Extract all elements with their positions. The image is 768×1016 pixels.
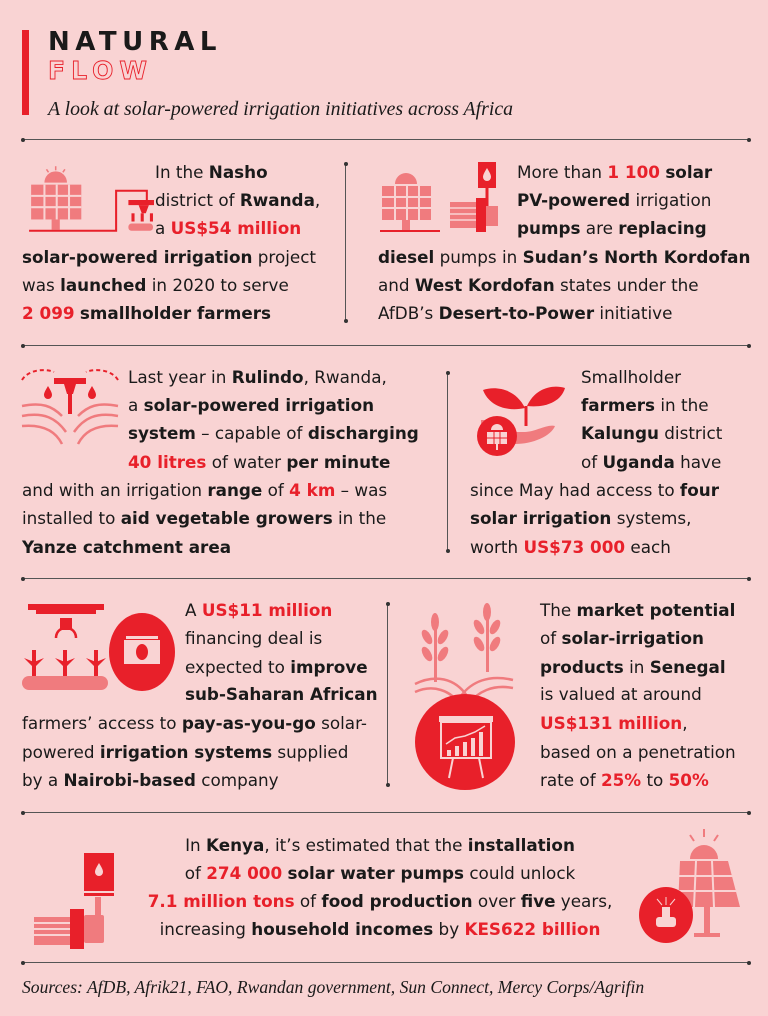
panel: Senegal market: based on a penetration	[540, 742, 736, 762]
panel: Nasho Rwanda: solar-powered irrigation project	[22, 247, 316, 267]
text: 7.1 million tons of food production over five years,	[148, 891, 612, 911]
text	[148, 835, 612, 939]
panel: Kalungu Uganda: Kalungu district	[581, 423, 722, 443]
panel: Sudan Kordofan: and West Kordofan states under the	[378, 275, 699, 295]
panel: Rulindo: and with an irrigation range of 4 km – was	[22, 480, 387, 500]
panel: Sudan Kordofan	[378, 162, 750, 323]
header	[22, 27, 513, 120]
panel: Senegal market: US$131 million,	[540, 713, 688, 733]
text: In Kenya, it’s estimated that the installation	[185, 835, 575, 855]
panel: Senegal market: products in Senegal	[540, 657, 726, 677]
icon: sprinkler crops and money badge	[22, 604, 175, 691]
panel: Senegal market	[414, 600, 736, 790]
text	[540, 600, 736, 790]
panel: Kalungu Uganda: solar irrigation systems,	[470, 508, 691, 528]
icon: hand with plant and solar badge	[477, 386, 565, 456]
icon: solar panel and sprinkler	[29, 166, 154, 232]
panel: Nasho Rwanda	[22, 162, 320, 323]
panel: Rulindo: system – capable of discharging	[128, 423, 419, 443]
panel: Senegal market: is valued at around	[540, 684, 702, 704]
panel: Rulindo: Yanze catchment area	[22, 537, 231, 557]
icon: solar panel and pump	[380, 162, 498, 232]
panel: Nasho Rwanda: a US$54 million	[155, 218, 301, 238]
text	[22, 367, 419, 557]
panel: Sudan Kordofan: PV-powered irrigation	[517, 190, 711, 210]
sources: Sources: AfDB, Afrik21, FAO, Rwandan government, Sun Connect, Mercy Corps/Agrifin	[22, 977, 644, 997]
panel: Kalungu Uganda: Smallholder	[581, 367, 681, 387]
panel: US$11 million financing: financing deal is	[185, 628, 322, 648]
panel: Kalungu Uganda	[470, 367, 722, 557]
panel: Kalungu Uganda: worth US$73 000 each	[470, 537, 671, 557]
text	[378, 162, 750, 323]
panel: Kenya	[34, 829, 740, 949]
icon: sprinkler over field	[21, 369, 119, 444]
panel: Nasho Rwanda: district of Rwanda,	[155, 190, 320, 210]
panel: US$11 million financing: farmers’ access to pay-as-you-go solar-	[22, 713, 367, 733]
panel: US$11 million financing: sub-Saharan African	[185, 684, 378, 704]
panel: Sudan Kordofan: diesel pumps in Sudan’s North Kordofan	[378, 247, 750, 267]
panel: Nasho Rwanda: In the Nasho	[155, 162, 268, 182]
title: NATURAL: NATURAL	[48, 27, 222, 57]
text	[470, 367, 722, 557]
panel: US$11 million financing: expected to improve	[185, 657, 368, 677]
panel: US$11 million financing: A US$11 million	[185, 600, 332, 620]
panel: Sudan Kordofan: pumps are replacing	[517, 218, 707, 238]
subtitle: A look at solar-powered irrigation initiatives across Africa	[48, 98, 513, 120]
panel: Nasho Rwanda: 2 099 smallholder farmers	[22, 303, 271, 323]
icon: wheat field and chart badge	[414, 603, 515, 790]
text: of 274 000 solar water pumps could unlock	[185, 863, 575, 883]
panel: Senegal market: rate of 25% to 50%	[540, 770, 709, 790]
panel: Sudan Kordofan: AfDB’s Desert-to-Power initiative	[378, 303, 672, 323]
panel: Kalungu Uganda: of Uganda have	[581, 452, 721, 472]
text	[22, 162, 320, 323]
panel: Nasho Rwanda: was launched in 2020 to serve	[22, 275, 289, 295]
panel: Kalungu Uganda: farmers in the	[581, 395, 709, 415]
icon: solar panel with sprinkler badge	[639, 829, 740, 943]
panel: Senegal market: The market potential	[540, 600, 735, 620]
panel: US$11 million financing	[22, 600, 378, 790]
panel: Senegal market: of solar-irrigation	[540, 628, 704, 648]
text	[22, 600, 378, 790]
panel: Rulindo: Last year in Rulindo, Rwanda,	[128, 367, 387, 387]
panel: Rulindo: installed to aid vegetable growers in the	[22, 508, 386, 528]
panel: Kalungu Uganda: since May had access to four	[470, 480, 719, 500]
panel: Rulindo: a solar-powered irrigation	[128, 395, 374, 415]
panel: Sudan Kordofan: More than 1 100 solar	[517, 162, 712, 182]
panel: Rulindo	[21, 367, 419, 557]
panel: Rulindo: 40 litres of water per minute	[128, 452, 390, 472]
text: increasing household incomes by KES622 billion	[160, 919, 600, 939]
icon: water pump	[34, 853, 114, 949]
red accent bar	[22, 30, 29, 115]
panel: US$11 million financing: by a Nairobi-based company	[22, 770, 279, 790]
panel: US$11 million financing: powered irrigation systems supplied	[22, 742, 348, 762]
